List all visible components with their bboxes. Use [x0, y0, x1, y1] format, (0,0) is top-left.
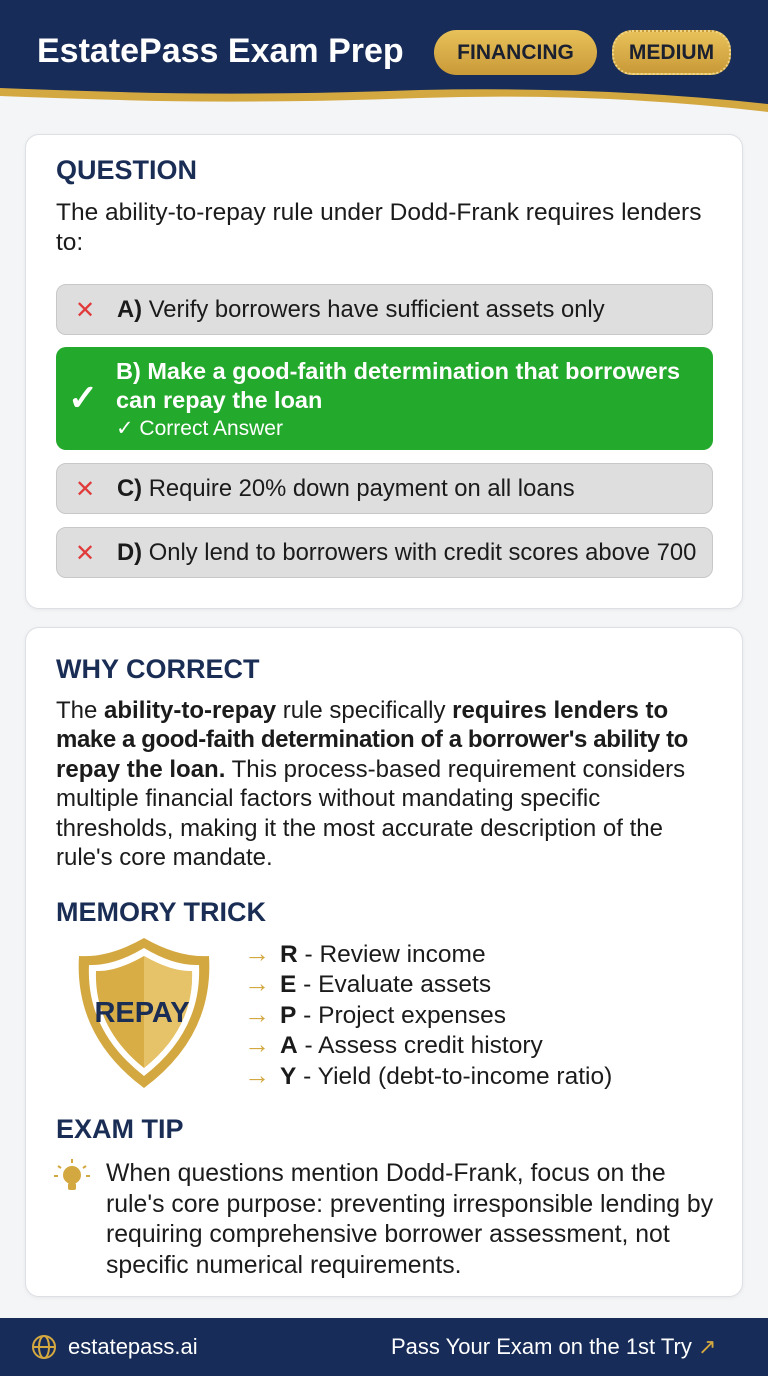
exam tip text: requiring comprehensive borrower assessment, not [106, 1221, 670, 1248]
why correct text: multiple financial factors without mandating specific [56, 785, 600, 812]
exam tip text: specific numerical requirements. [106, 1252, 462, 1278]
why correct text: repay the loan. This process-based requirement considers [56, 756, 685, 783]
header [0, 0, 768, 112]
question text: The ability-to-repay rule under Dodd-Frank requires lenders to: [56, 199, 701, 256]
mnemonic list: → [244, 938, 270, 968]
mnemonic list: A - Assess credit history [280, 1032, 543, 1059]
mnemonic list: P - Project expenses [280, 1002, 506, 1029]
panel: question [25, 134, 743, 609]
panel: explanation [25, 627, 743, 1297]
badge: financing [434, 30, 597, 75]
mnemonic list: → [244, 1060, 270, 1090]
exam tip text [106, 1160, 714, 1278]
option C: Require 20% down payment on all loans [149, 474, 575, 502]
option D: ✕ [75, 540, 95, 567]
mnemonic list: → [244, 968, 270, 998]
why correct text: rule's core mandate. [56, 844, 273, 871]
badge: financing: FINANCING [457, 40, 574, 64]
option B correct: ✓ Correct Answer [116, 417, 283, 440]
why correct heading: WHY CORRECT [56, 654, 260, 684]
mnemonic list: R - Review income [280, 941, 486, 968]
option A [56, 284, 713, 335]
option D: D) [117, 538, 142, 566]
mnemonic list: → [244, 1029, 270, 1059]
option A: ✕ [75, 297, 95, 324]
footer tagline: Pass Your Exam on the 1st Try ↗ [391, 1334, 716, 1359]
question heading: QUESTION [56, 155, 197, 185]
why correct text [56, 697, 688, 871]
mnemonic list [244, 938, 612, 1090]
why correct text: The ability-to-repay rule specifically requires lenders to [56, 697, 668, 724]
option B correct [56, 347, 713, 450]
footer site: estatepass.ai [68, 1334, 198, 1359]
badge: medium: MEDIUM [629, 40, 714, 64]
mnemonic list: E - Evaluate assets [280, 971, 491, 998]
exam tip heading: EXAM TIP [56, 1114, 184, 1144]
why correct text: make a good-faith determination of a borrower's ability to [56, 726, 688, 753]
option C [56, 463, 713, 514]
exam tip text: rule's core purpose: preventing irresponsible lending by [106, 1190, 713, 1218]
option C: C) [117, 474, 142, 502]
footer [0, 1318, 768, 1376]
exam tip text: When questions mention Dodd-Frank, focus on the [106, 1160, 666, 1187]
icon: shield [78, 938, 210, 1088]
icon: lightbulb [54, 1159, 90, 1190]
mnemonic list: Y - Yield (debt-to-income ratio) [280, 1063, 612, 1090]
title: EstatePass Exam Prep [37, 32, 404, 70]
option C: ✕ [75, 476, 95, 503]
option A: A) [117, 296, 142, 322]
icon: shield: REPAY [94, 997, 190, 1029]
icon: globe [32, 1335, 56, 1359]
mnemonic list: → [244, 999, 270, 1029]
memory trick heading: MEMORY TRICK [56, 897, 266, 927]
option B correct: B) Make a good-faith determination that borrowers can repay the loan [116, 358, 680, 413]
option B correct: ✓ [68, 377, 98, 418]
option D [56, 527, 713, 578]
option D: Only lend to borrowers with credit scores above 700 [149, 538, 696, 566]
why correct text: thresholds, making it the most accurate description of the [56, 815, 663, 842]
badge: medium [612, 30, 731, 75]
option A: Verify borrowers have sufficient assets only [149, 296, 605, 322]
